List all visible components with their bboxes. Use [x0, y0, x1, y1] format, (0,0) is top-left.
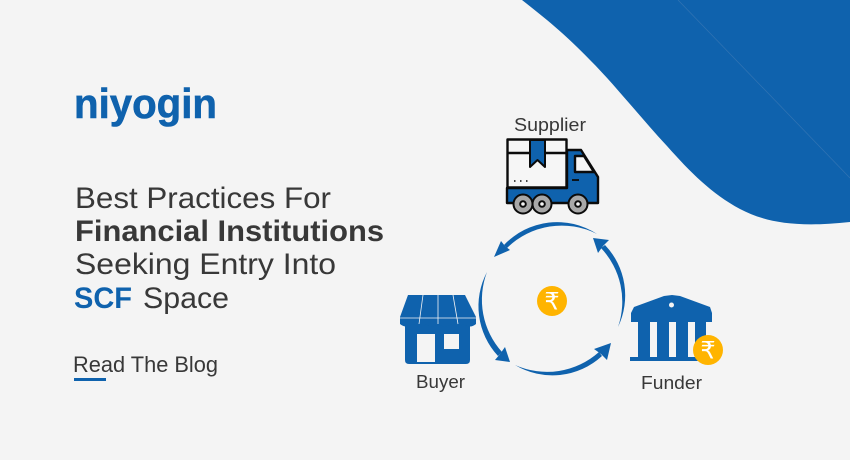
- logo: niyogin: niyogin: [74, 80, 217, 127]
- call to action: read the blog: Read The Blog: [73, 352, 218, 377]
- funder label: Funder: [641, 373, 702, 393]
- title: Best Practices For: [75, 182, 331, 215]
- icon: buyer store: [400, 295, 476, 364]
- title: SCF: [74, 282, 132, 315]
- decorative blue wave corner: [522, 0, 850, 224]
- title: Financial Institutions: [75, 215, 384, 248]
- icon: rupee coin centre: [537, 286, 567, 316]
- icon: supplier truck: [507, 140, 598, 214]
- arrow: top, towards buyer: [494, 222, 597, 257]
- title: [74, 182, 384, 315]
- arrow: left, towards buyer: [478, 272, 510, 362]
- icon: rupee coin funder: ₹: [700, 336, 716, 364]
- title: Space: [143, 282, 229, 315]
- arrow: bottom, towards funder: [515, 343, 611, 375]
- title: Seeking Entry Into: [75, 248, 336, 281]
- cycle arrows: [478, 222, 625, 375]
- supplier label: Supplier: [514, 115, 586, 135]
- icon: rupee coin funder: [693, 335, 723, 365]
- icon: funder bank: [630, 295, 712, 361]
- buyer label: Buyer: [416, 372, 465, 392]
- icon: rupee coin centre: ₹: [544, 288, 560, 316]
- arrow: right, towards supplier: [593, 238, 625, 327]
